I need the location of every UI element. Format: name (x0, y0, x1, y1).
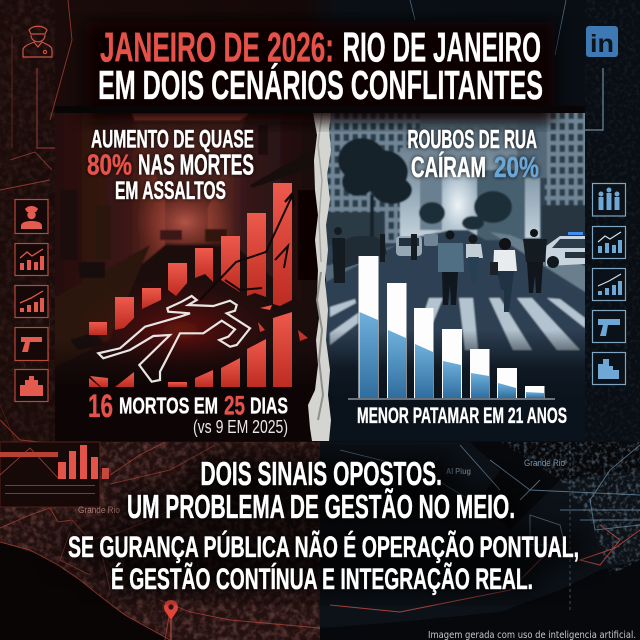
comparison: (vs 9 EM 2025) (193, 417, 288, 437)
heading line 1: ROUBOS DE RUA (408, 126, 537, 154)
heading line 2: CAÍRAM (411, 150, 486, 184)
stat 80%: 80% (87, 150, 132, 182)
trees right (419, 191, 512, 230)
label: neighbourhood: Al Piug (446, 467, 471, 476)
number 25: 25 (224, 390, 245, 420)
title line 1 red: JANEIRO DE 2026: (100, 24, 334, 70)
dark shadow behind closing text (60, 458, 585, 592)
icon box: growth chart (592, 268, 626, 300)
icon: LinkedIn: in (590, 30, 614, 58)
left stat: deaths count (88, 388, 288, 437)
dark band behind title (85, 22, 555, 122)
pedestrians (332, 227, 547, 312)
parked cars (332, 234, 438, 268)
icon box: growth chart (15, 286, 48, 318)
mini bar chart panel: bottom left (0, 442, 109, 507)
icon box: crowd (15, 370, 48, 402)
icon box: people (592, 184, 626, 216)
title (98, 24, 543, 108)
road (421, 229, 484, 252)
crosswalk (330, 298, 585, 350)
icon box: officer (15, 200, 48, 234)
police car (546, 232, 585, 268)
map lines: red coast on the right (330, 525, 640, 612)
line 1: DOIS SINAIS OPOSTOS. (200, 456, 442, 493)
icon: LinkedIn (586, 26, 618, 58)
icon box: pistol (592, 310, 626, 342)
icon: police officer outline (23, 26, 52, 57)
arrow: black trend arrow over bars (200, 194, 294, 300)
right scene: street (320, 108, 590, 446)
panel caps: dark edge above panels (55, 106, 585, 113)
map lines: red side (0, 0, 320, 640)
map lines: blue side (340, 0, 640, 610)
heading line 3: EM ASSALTOS (115, 177, 226, 205)
left sidebar icons (15, 200, 48, 402)
heading line 1: AUMENTO DE QUASE (91, 126, 254, 154)
stat 20%: 20% (494, 152, 539, 184)
left heading: deaths (87, 126, 254, 205)
fade (326, 330, 585, 400)
icon box: city (592, 352, 626, 384)
right sidebar icons (592, 184, 626, 384)
chalk body outline (98, 296, 250, 382)
icon box: chart (592, 226, 626, 258)
word dias: DIAS (250, 392, 288, 418)
icon: map pin (164, 600, 178, 640)
icon box: pistol (15, 328, 48, 360)
bar chart: falling robberies (348, 256, 555, 399)
icon box: rising chart (15, 244, 48, 276)
heading line 2: NAS MORTES (138, 150, 254, 182)
tree left (338, 138, 412, 240)
number 16: 16 (88, 388, 113, 424)
words: MORTOS EM (119, 392, 218, 418)
torn paper divider (308, 113, 331, 441)
closing message (68, 456, 579, 596)
right heading: robberies (408, 126, 539, 184)
label: Grande Rio blue: Grande Rio (524, 458, 565, 469)
bar chart: rising deaths (89, 183, 308, 387)
left scene: dark alley (50, 108, 322, 446)
label: Grande Rio red: Grande Rio (78, 505, 120, 516)
